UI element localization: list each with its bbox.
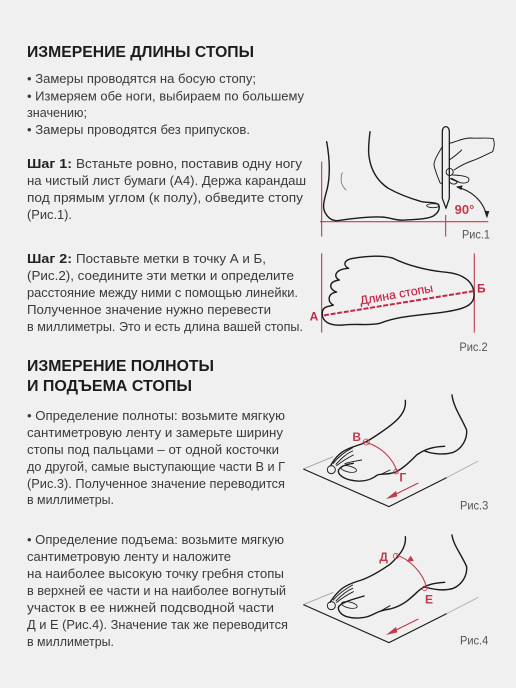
figure 1: foot side view with pencil: Рис.1 [462, 227, 490, 241]
heading: foot length: ИЗМЕРЕНИЕ ДЛИНЫ СТОПЫ [27, 44, 254, 61]
text block: instep measurement: участок в ее нижней подсводной части [27, 600, 274, 615]
text block: measurement rules: значению; [27, 105, 87, 120]
text block: instep measurement: в миллиметры. [27, 634, 114, 649]
figure 4: instep measurement: Д [379, 550, 388, 564]
figure 3: foot width measurement: В [352, 430, 361, 444]
text block: measurement rules [27, 71, 304, 137]
figure 1: foot side view with pencil [320, 127, 494, 241]
text block: step 1: Встаньте ровно, поставив одну ногу [76, 156, 303, 171]
figure 4: instep measurement: Рис.4 [460, 633, 489, 647]
text block: instep measurement: сантиметровую ленту и наложите [27, 549, 231, 564]
figure 3: foot width measurement [303, 395, 489, 512]
text block: measurement rules: • Замеры проводятся без припусков. [27, 122, 250, 137]
figure 3: foot width measurement: Рис.3 [460, 498, 489, 512]
figure 3: foot width measurement: Г [399, 471, 406, 485]
text block: step 2: (Рис.2), соедините эти метки и определите [27, 268, 294, 283]
figure 4: instep measurement [303, 535, 489, 647]
text block: step 1: (Рис.1). [27, 207, 72, 222]
text block: measurement rules: • Замеры проводятся на босую стопу; [27, 71, 256, 86]
text block: width measurement: в миллиметры. [27, 492, 114, 507]
text block: step 2: Поставьте метки в точку А и Б, [76, 251, 266, 266]
text block: instep measurement: на наиболее высокую точку гребня стопы [27, 566, 284, 581]
text block: instep measurement: Д и Е (Рис.4). Значение так же переводится [27, 617, 288, 632]
text block: instep measurement: • Определение подъема: возьмите мягкую [27, 532, 284, 547]
text block: step 1 [27, 156, 306, 222]
text block: step 2: Полученное значение нужно перевести [27, 302, 271, 317]
heading: width and instep [27, 358, 214, 395]
figure 1: foot side view with pencil: 90° [455, 202, 474, 217]
heading: width and instep: ИЗМЕРЕНИЕ ПОЛНОТЫ [27, 358, 214, 375]
text block: width measurement: (Рис.3). Полученное значение переводится [27, 476, 285, 491]
figure 2: foot outline with length line [310, 253, 488, 354]
text block: measurement rules: • Измеряем обе ноги, выбираем по большему [27, 88, 304, 104]
text block: instep measurement: в верхней ее части и на наиболее вогнутый [27, 583, 286, 598]
text block: step 2: расстояние между ними с помощью линейки. [27, 285, 298, 300]
text block: width measurement: до другой, самые выступающие части В и Г [27, 459, 285, 474]
figure 2: foot outline with length line: Б [477, 282, 486, 296]
text block: width measurement: • Определение полноты: возьмите мягкую [27, 408, 285, 423]
text block: step 1: Шаг 1: [27, 156, 72, 171]
text block: step 1: на чистый лист бумаги (А4). Держа карандаш [27, 173, 306, 188]
figure 2: foot outline with length line: Рис.2 [459, 340, 488, 354]
text block: step 1: под прямым углом (к полу), обведите стопу [27, 190, 304, 205]
text block: step 2 [27, 251, 303, 334]
text block: step 2: в миллиметры. Это и есть длина вашей стопы. [27, 319, 303, 334]
text block: width measurement [27, 408, 285, 507]
text block: step 2: Шаг 2: [27, 251, 72, 266]
text block: width measurement: сантиметровую ленту и замерьте ширину [27, 425, 284, 440]
figure 2: foot outline with length line: Длина стопы [359, 281, 434, 308]
heading: width and instep: И ПОДЪЕМА СТОПЫ [27, 378, 192, 395]
figure 4: instep measurement: Е [425, 593, 433, 607]
figure 2: foot outline with length line: А [310, 309, 319, 323]
text block: instep measurement [27, 532, 288, 649]
text block: width measurement: стопы под пальцами – от одной косточки [27, 442, 279, 457]
